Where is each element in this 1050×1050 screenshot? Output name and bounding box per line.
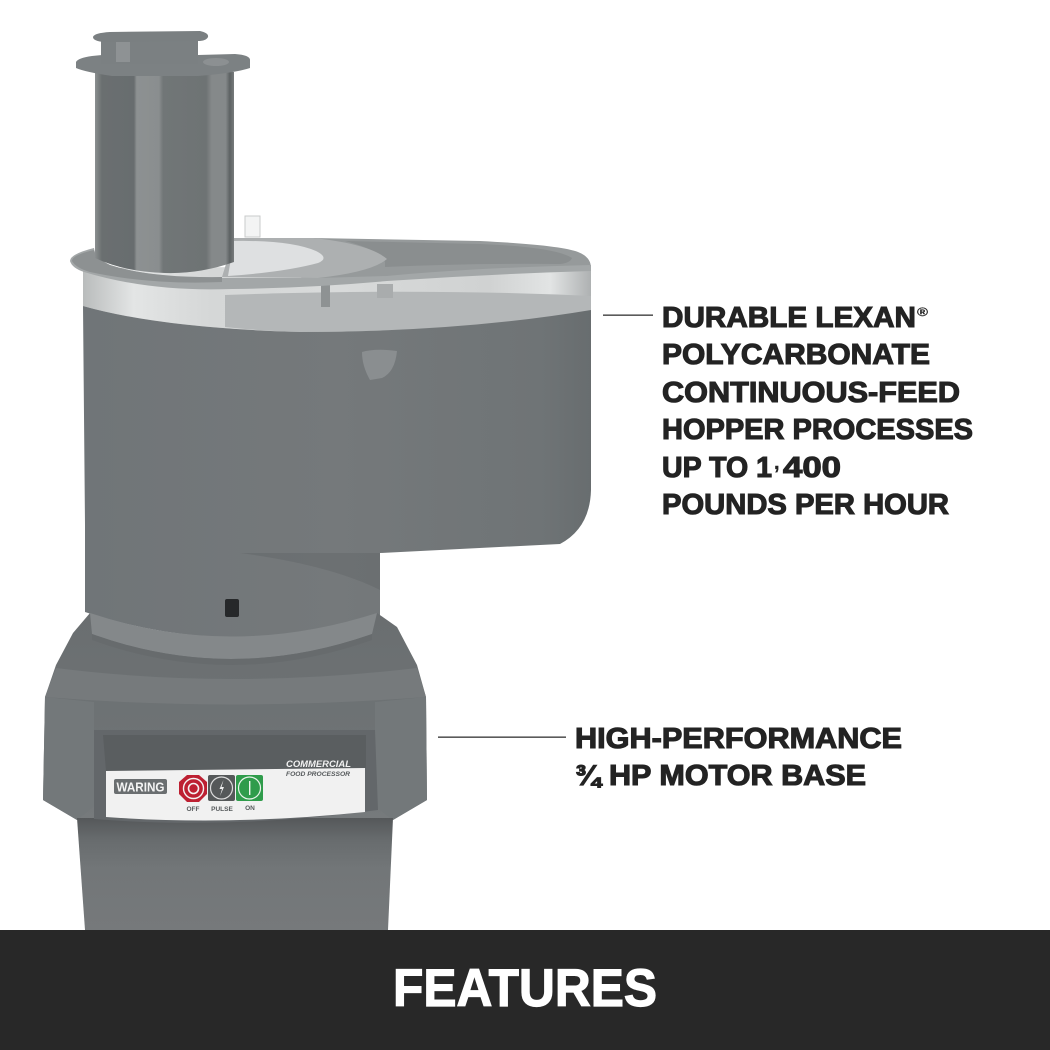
food processor label: FOOD PROCESSOR — [286, 771, 350, 778]
panel dark band — [103, 735, 366, 771]
brand: waring logo: WARING — [116, 780, 164, 794]
callout: hopper feature — [662, 302, 973, 521]
off button — [179, 775, 207, 802]
panel white label — [106, 768, 365, 821]
collar shadow — [92, 634, 372, 665]
base top ledge — [45, 668, 426, 704]
callout: hopper feature: DURABLE LEXAN — [662, 302, 916, 334]
base lower lip highlight — [43, 697, 94, 820]
callout: motor base feature: HIGH-PERFORMANCE — [575, 723, 902, 755]
hopper latch — [362, 350, 397, 380]
base collar ring — [90, 613, 377, 659]
callout: hopper feature: HOPPER PROCESSES — [662, 414, 973, 446]
rim left inner — [72, 250, 222, 283]
on label: ON — [245, 805, 255, 812]
callout: motor base feature: ¾ HP MOTOR BASE — [575, 760, 866, 792]
feed tube pusher cap — [93, 31, 208, 64]
callout: motor base feature — [575, 723, 902, 792]
second hopper clip — [377, 284, 393, 298]
clear disc outer ring — [222, 238, 387, 278]
hopper clip — [321, 283, 330, 307]
callout: hopper feature: POUNDS PER HOUR — [662, 489, 949, 521]
on button — [236, 775, 263, 801]
pulse label: PULSE — [211, 806, 233, 813]
footer banner — [0, 930, 1050, 1050]
feed tube flange — [76, 54, 250, 76]
hopper body — [83, 306, 591, 638]
clear disc inner — [228, 241, 324, 276]
callout: hopper feature: POLYCARBONATE — [662, 339, 930, 371]
panel recess — [94, 730, 378, 823]
off label: OFF — [186, 806, 200, 813]
callout: hopper feature: CONTINUOUS-FEED — [662, 377, 960, 409]
clear hopper wall — [83, 265, 591, 332]
hopper inner tray — [345, 241, 572, 267]
callout: hopper feature: 400 — [783, 452, 841, 484]
motor base lower housing — [77, 818, 393, 930]
callout: hopper feature: UP TO 1 — [662, 452, 772, 484]
commercial label: COMMERCIAL — [286, 759, 351, 770]
feed tube cylinder — [95, 72, 234, 273]
underside shadow — [240, 553, 380, 590]
leader line: motor base — [438, 736, 566, 738]
slot — [225, 599, 239, 617]
hopper lid right section — [300, 238, 591, 282]
callout: hopper feature: ® — [917, 305, 928, 319]
hopper rim — [70, 248, 591, 289]
control panel — [94, 730, 378, 823]
grey reflection in wall — [225, 292, 591, 332]
base lower lip highlight right — [375, 697, 427, 820]
food processor illustration — [43, 31, 591, 930]
leader line: hopper — [603, 314, 653, 316]
small clear pin — [245, 216, 260, 237]
motor base shoulder — [43, 613, 427, 820]
footer heading: FEATURES — [393, 959, 657, 1018]
pulse button — [208, 775, 235, 801]
callout: hopper feature: , — [774, 452, 780, 474]
